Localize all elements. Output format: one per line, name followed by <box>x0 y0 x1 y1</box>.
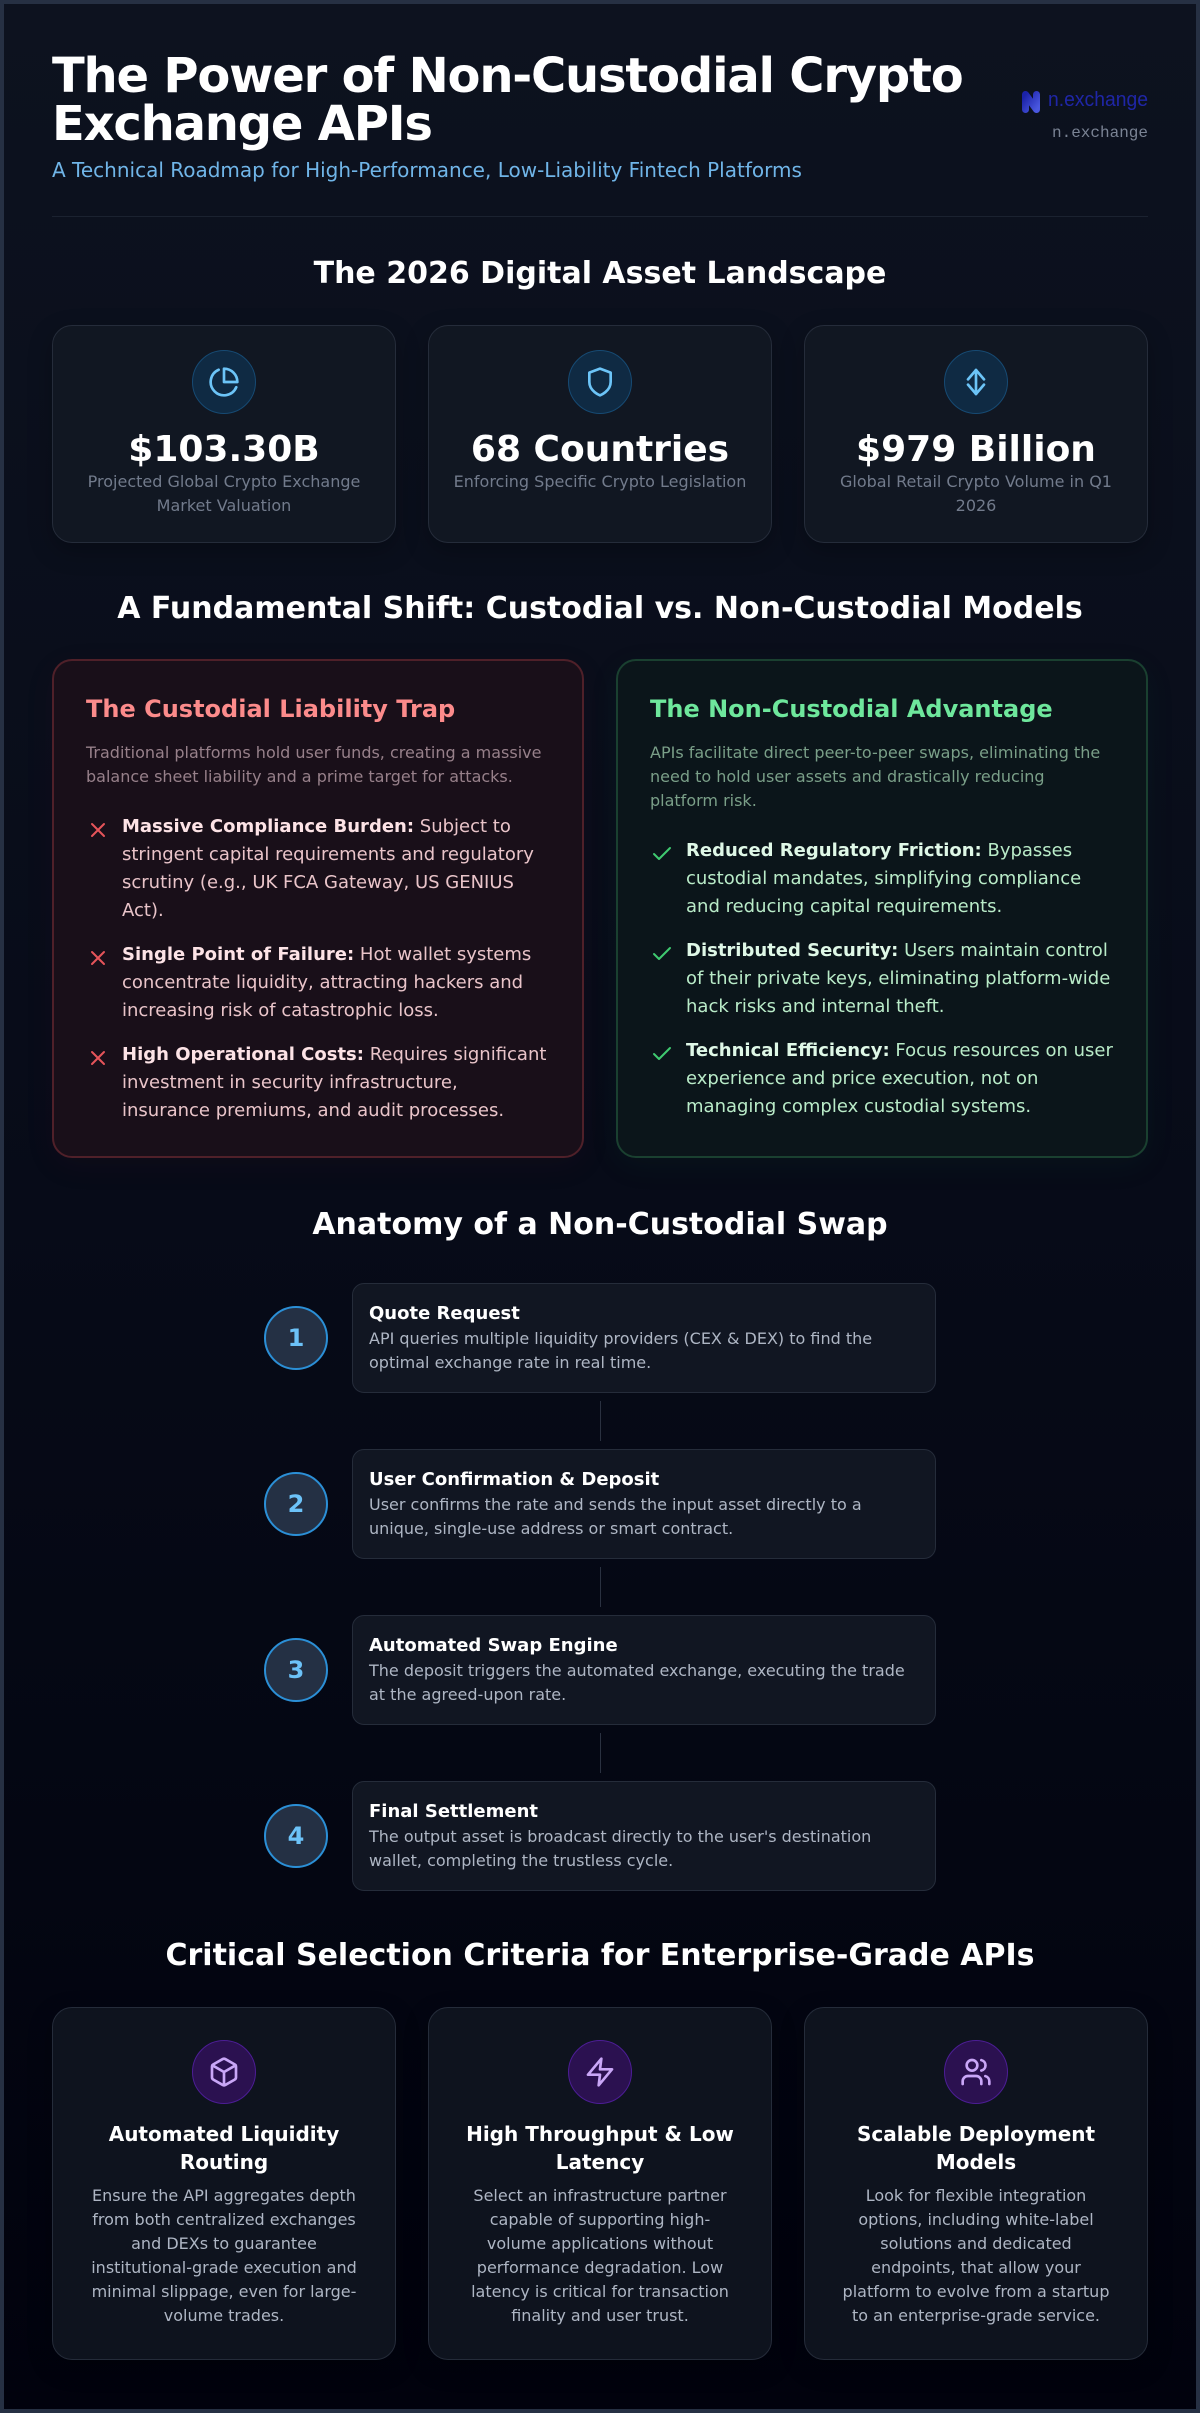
panel: non-custodial advantage <box>616 659 1148 1158</box>
heading: fundamental shift: A Fundamental Shift: Custodial vs. Non-Custodial Models <box>117 591 1083 626</box>
panel: stat countries <box>428 325 772 543</box>
list of drawbacks: Single Point of Failure: Hot wallet systems concentrate liquidity, attracting hackers and increasing risk of catastrophic loss. <box>122 944 531 1021</box>
panel: custodial liability trap <box>52 659 584 1158</box>
panel: automated liquidity routing <box>52 2007 396 2360</box>
list of advantages: Reduced Regulatory Friction: Bypasses custodial mandates, simplifying compliance and reducing capital requirements. <box>686 840 1081 917</box>
criterion text: Ensure the API aggregates depth from both centralized exchanges and DEXs to guarantee institutional-grade execution and minimal slippage, even for large-volume trades. <box>91 2186 357 2325</box>
list of drawbacks <box>91 816 546 1121</box>
stat value: 68 Countries <box>471 429 729 470</box>
step 2 number <box>264 1472 328 1536</box>
heading: landscape: The 2026 Digital Asset Landscape <box>314 256 886 291</box>
step 4 card: The output asset is broadcast directly to the user's destination wallet, completing the trustless cycle. <box>369 1827 871 1870</box>
list of advantages: Technical Efficiency: Focus resources on user experience and price execution, not on managing complex custodial systems. <box>686 1040 1113 1117</box>
list of drawbacks: High Operational Costs: Requires significant investment in security infrastructure, insurance premiums, and audit processes. <box>122 1044 546 1121</box>
stat value: $979 Billion <box>856 429 1096 470</box>
step 4 card: Final Settlement <box>369 1801 538 1822</box>
icon: cube <box>192 2040 256 2104</box>
step 2 card <box>352 1449 936 1559</box>
list of advantages <box>653 840 1113 1117</box>
step 3 number <box>264 1638 328 1702</box>
panel: stat retail volume <box>804 325 1148 543</box>
step 4 number <box>264 1804 328 1868</box>
step 4 number: 4 <box>288 1822 304 1850</box>
criterion text: Look for flexible integration options, including white-label solutions and dedicated endpoints, that allow your platform to evolve from a startup to an enterprise-grade service. <box>843 2186 1109 2325</box>
criterion title: High Throughput & Low Latency <box>466 2122 734 2174</box>
heading: selection criteria: Critical Selection Criteria for Enterprise-Grade APIs <box>165 1938 1035 1973</box>
subtitle: A Technical Roadmap for High-Performance, Low-Liability Fintech Platforms <box>52 158 802 182</box>
step 1 card <box>352 1283 936 1393</box>
step 3 card: The deposit triggers the automated exchange, executing the trade at the agreed-upon rate. <box>369 1661 905 1704</box>
panel: stat market valuation <box>52 325 396 543</box>
step 2 number: 2 <box>288 1490 304 1518</box>
list of advantages: Distributed Security: Users maintain control of their private keys, eliminating platform-wide hack risks and internal theft. <box>686 940 1110 1017</box>
panel heading: The Custodial Liability Trap <box>86 695 455 723</box>
panel heading: The Non-Custodial Advantage <box>650 695 1053 723</box>
step 1 number <box>264 1306 328 1370</box>
criterion title: Scalable Deployment Models <box>857 2122 1095 2174</box>
brand label: n.exchange <box>1052 124 1148 142</box>
step 4 card <box>352 1781 936 1891</box>
stat label: Enforcing Specific Crypto Legislation <box>454 472 746 491</box>
heading: anatomy: Anatomy of a Non-Custodial Swap <box>312 1207 888 1242</box>
panel description: Traditional platforms hold user funds, creating a massive balance sheet liability and a prime target for attacks. <box>86 743 541 786</box>
stat label: Global Retail Crypto Volume in Q1 2026 <box>840 472 1112 515</box>
step 3 number: 3 <box>288 1656 304 1684</box>
step 1 card: API queries multiple liquidity providers (CEX & DEX) to find the optimal exchange rate in real time. <box>369 1329 872 1372</box>
step 2 card: User Confirmation & Deposit <box>369 1469 659 1490</box>
icon: lightning bolt <box>568 2040 632 2104</box>
step 1 card: Quote Request <box>369 1303 520 1324</box>
stat label: Projected Global Crypto Exchange Market Valuation <box>88 472 360 515</box>
stat value: $103.30B <box>128 429 320 470</box>
icon: shield <box>568 350 632 414</box>
panel: scalable deployment <box>804 2007 1148 2360</box>
list of drawbacks: Massive Compliance Burden: Subject to stringent capital requirements and regulatory scrutiny (e.g., UK FCA Gateway, US GENIUS Act). <box>122 816 534 921</box>
step 3 card <box>352 1615 936 1725</box>
criterion title: Automated Liquidity Routing <box>109 2122 339 2174</box>
panel description: APIs facilitate direct peer-to-peer swaps, eliminating the need to hold user assets and drastically reducing platform risk. <box>650 743 1100 810</box>
step 1 number: 1 <box>288 1324 304 1352</box>
title: The Power of Non-Custodial Crypto Exchange APIs <box>52 48 963 152</box>
step 2 card: User confirms the rate and sends the input asset directly to a unique, single-use address or smart contract. <box>369 1495 862 1538</box>
icon: up-down arrows <box>944 350 1008 414</box>
icon: pie chart <box>192 350 256 414</box>
criterion text: Select an infrastructure partner capable of supporting high-volume applications without performance degradation. Low latency is critical for transaction finality and user trust. <box>471 2186 729 2325</box>
panel: high throughput <box>428 2007 772 2360</box>
step 3 card: Automated Swap Engine <box>369 1635 618 1656</box>
icon: users <box>944 2040 1008 2104</box>
